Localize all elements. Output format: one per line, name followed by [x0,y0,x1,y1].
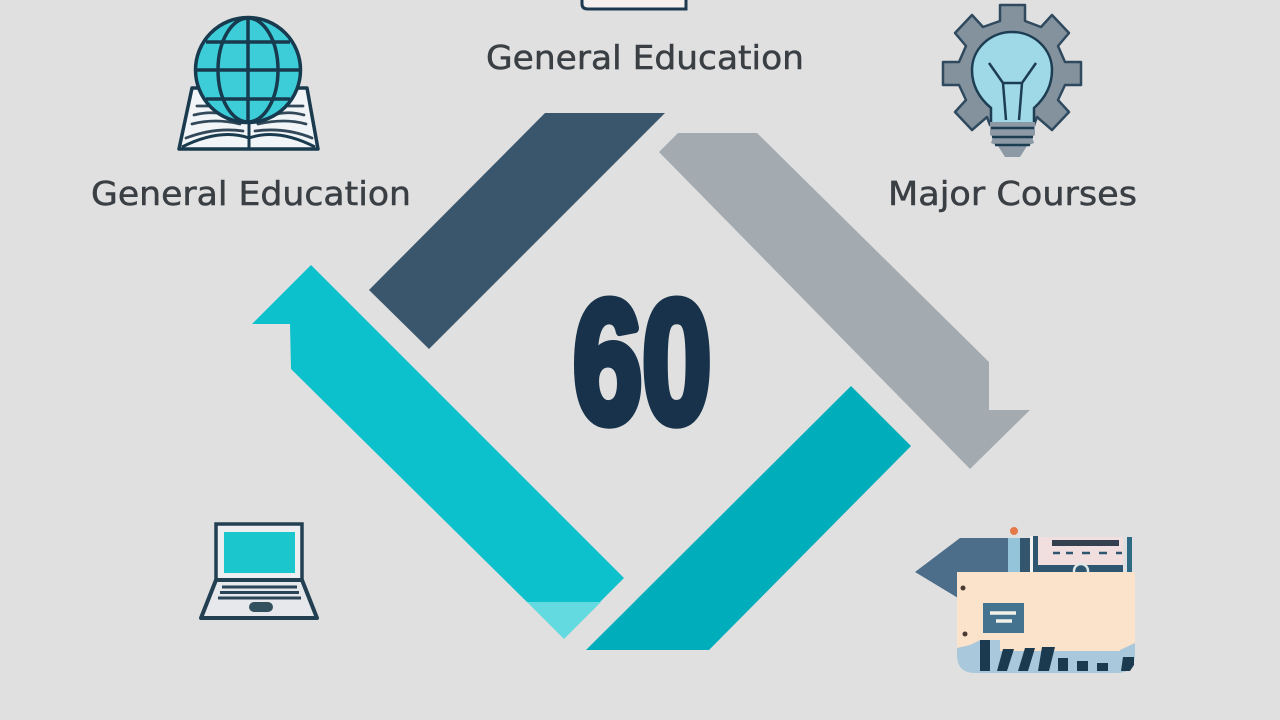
icon part: bulb screw base [990,122,1035,157]
label: left General Education: General Education [91,174,411,213]
icon: laptop [201,524,317,618]
center number: 60 [573,266,711,460]
arrow: dark blue segment [369,113,665,349]
diagram: cycle of arrows [252,113,1030,650]
icon: globe on open book [179,18,318,149]
icon: partial card cropped at top [582,0,686,9]
icon: lightbulb in gear [943,5,1081,157]
arrow: gray segment [659,133,1030,469]
icon: folder with chart [915,527,1135,673]
label: top General Education: General Education [486,38,804,77]
arrow: bottom teal segment [586,386,911,650]
label: Major Courses: Major Courses [888,174,1137,213]
arrow: left teal segment [252,265,624,639]
